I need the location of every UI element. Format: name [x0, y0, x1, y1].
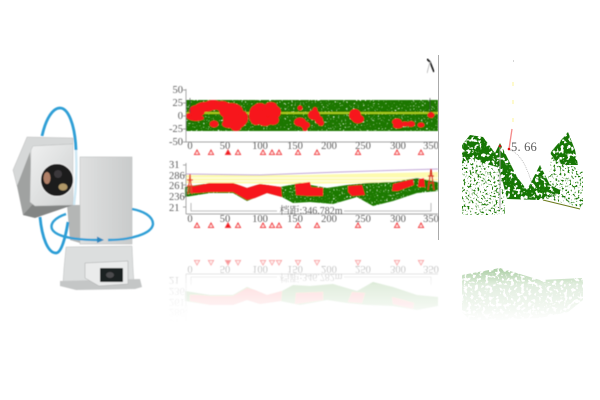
base mounting plate	[60, 279, 142, 290]
tower marks	[190, 98, 430, 113]
clearance value: 5. 66	[511, 140, 537, 154]
blue horizontal rotation arrow	[52, 209, 153, 240]
reflected side profile: 0	[187, 263, 193, 274]
span label: 档距:346.782m	[279, 204, 343, 217]
reflected side profile: 200	[321, 263, 337, 274]
conductor line	[186, 169, 438, 175]
x axis labels: 300	[390, 141, 406, 152]
chart: top view point cloud: 0	[178, 111, 183, 122]
chart: top view point cloud: -25	[169, 124, 183, 135]
camera pedestal box	[80, 157, 132, 244]
chart: cross-section point cloud	[462, 61, 583, 215]
reflected cross-section vegetation	[462, 268, 583, 313]
camera lens	[40, 164, 74, 196]
dense canopy and ridge	[462, 135, 560, 200]
clearance bands	[186, 172, 438, 184]
x axis labels: 50	[220, 214, 230, 225]
reflected side profile: 21	[169, 274, 180, 285]
reflected side profile: 150	[287, 263, 303, 274]
base secondary lens housing	[85, 261, 128, 286]
reflected side profile	[170, 260, 439, 310]
vertical yellow dashes	[512, 82, 514, 130]
chart: top view point cloud: 25	[172, 98, 183, 109]
left tower	[187, 174, 193, 194]
camera housing underside	[23, 204, 73, 218]
chart: side profile point cloud: 21	[169, 203, 180, 214]
x axis labels: 300	[390, 214, 406, 225]
icon: PTZ camera with blue rotation arrows	[13, 108, 153, 290]
blue vertical rotation ring (back)	[42, 108, 76, 150]
chart: side profile point cloud: 261	[169, 181, 185, 192]
red hazard clusters	[186, 100, 434, 131]
x axis labels	[187, 141, 439, 152]
x axis labels: 100	[252, 141, 268, 152]
reflected side profile: 50	[220, 263, 230, 274]
x axis labels: 200	[321, 214, 337, 225]
reflected side profile: 350	[423, 263, 439, 274]
camera housing side	[17, 152, 35, 217]
reflected side profile: 250	[355, 263, 371, 274]
x axis labels: 0	[187, 214, 193, 225]
camera sun shield	[13, 137, 73, 186]
chart: side profile point cloud: 236	[169, 192, 185, 203]
tower triangle markers	[194, 150, 424, 154]
chart: side profile point cloud: 286	[169, 171, 185, 182]
x axis labels: 150	[287, 141, 303, 152]
corridor band	[186, 100, 438, 131]
camera base	[63, 246, 134, 283]
y axis labels: 31	[169, 160, 180, 171]
span bracket	[191, 203, 431, 211]
conductor centre line	[186, 112, 438, 114]
y axis labels: 50	[172, 85, 183, 96]
right tower	[428, 169, 434, 190]
x axis labels: 250	[355, 214, 371, 225]
arrow head	[97, 236, 104, 243]
x axis labels: 200	[321, 141, 337, 152]
sparse lower-right vegetation	[545, 155, 583, 208]
reflected side profile: 261	[169, 296, 185, 307]
red hazard segments on terrain	[190, 183, 282, 200]
infographic canvas	[12, 55, 583, 313]
icon: compass north arrow	[427, 59, 434, 73]
reflected side profile: 档距:346.782m	[279, 271, 343, 284]
reflected side profile: 100	[252, 263, 268, 274]
x axis labels: 50	[220, 141, 230, 152]
axes	[183, 89, 438, 142]
tower triangle markers	[194, 223, 424, 228]
chart: top view point cloud	[169, 85, 439, 154]
clearance line	[509, 129, 512, 149]
lens reflections	[44, 172, 50, 184]
x axis labels: 0	[187, 141, 193, 152]
x axis labels: 250	[355, 141, 371, 152]
x axis labels: 350	[423, 214, 439, 225]
reflected side profile: 31	[169, 317, 180, 328]
terrain band	[185, 178, 438, 206]
sparse lower-left vegetation	[462, 150, 505, 215]
pale ring segment over the housing	[74, 150, 76, 205]
x axis labels: 150	[287, 214, 303, 225]
chart: top view point cloud: -50	[169, 137, 183, 148]
panel divider line	[438, 55, 439, 240]
right peak vegetation	[550, 132, 578, 165]
sag curve	[510, 150, 533, 188]
x axis labels: 350	[423, 141, 439, 152]
blue vertical rotation ring (front)	[40, 217, 68, 253]
reflected side profile: 300	[390, 263, 406, 274]
reflection of charts	[170, 260, 583, 313]
ground line	[543, 200, 580, 209]
camera neck	[67, 205, 80, 243]
chart: side profile point cloud	[169, 160, 439, 228]
x axis labels: 100	[252, 214, 268, 225]
reflected side profile: 236	[169, 285, 185, 296]
camera housing front	[30, 144, 73, 206]
axes	[183, 163, 438, 214]
base lens window	[100, 268, 123, 282]
pole	[499, 146, 501, 210]
reflected side profile: 286	[169, 306, 185, 317]
x axis labels	[187, 214, 439, 225]
clearance points	[508, 148, 510, 150]
